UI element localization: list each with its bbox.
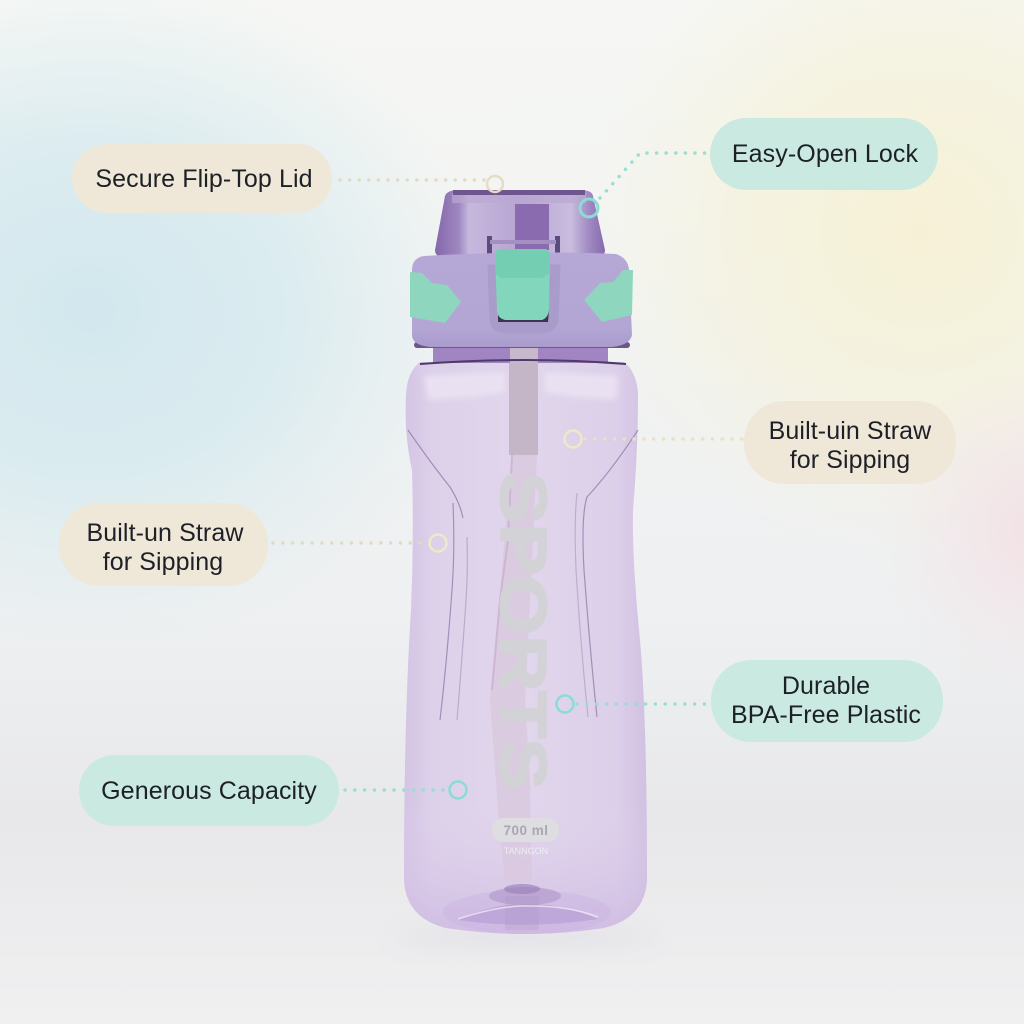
lock latch housing [488, 265, 560, 333]
capacity badge: TANNGON [504, 846, 548, 856]
callout: Easy-Open Lock [580, 118, 938, 217]
bottle body [404, 362, 647, 934]
callout: Built-un Straw for Sipping [59, 503, 446, 586]
lock latch [495, 249, 550, 322]
callout: Easy-Open Lock: Easy-Open Lock [732, 140, 919, 168]
capacity badge [492, 818, 559, 856]
SPORTS lettering: SPORTS [487, 472, 560, 790]
straw [490, 348, 539, 930]
transparent lid dome [435, 190, 605, 266]
left grip pad [410, 272, 461, 323]
right grip pad [584, 270, 633, 322]
lid collar [412, 252, 632, 347]
callout: Generous Capacity [79, 755, 466, 826]
neck ring [414, 342, 630, 364]
callout: Durable BPA-Free Plastic [556, 660, 943, 742]
capacity badge: 700 ml [503, 823, 549, 838]
callout: Durable BPA-Free Plastic: BPA-Free Plastic [731, 701, 921, 729]
callout: Built-un Straw for Sipping: Built-un Straw [86, 519, 244, 547]
shoulder highlights [424, 372, 618, 400]
grip contour lines [408, 430, 638, 720]
ground shadow [390, 930, 660, 946]
callout: Secure Flip-Top Lid [72, 144, 503, 213]
bottle [404, 348, 647, 934]
base dome [443, 884, 611, 934]
callout: Durable BPA-Free Plastic: Durable [782, 672, 870, 700]
callout: Built-un Straw for Sipping: for Sipping [103, 548, 223, 576]
callout: Secure Flip-Top Lid: Secure Flip-Top Lid [95, 165, 313, 193]
callout: Generous Capacity: Generous Capacity [101, 777, 317, 805]
callout: Built-uin Straw for Sipping: for Sipping [790, 446, 910, 474]
callout: Built-uin Straw for Sipping [564, 401, 956, 484]
lid [410, 190, 633, 364]
callout: Built-uin Straw for Sipping: Built-uin Straw [769, 417, 932, 445]
